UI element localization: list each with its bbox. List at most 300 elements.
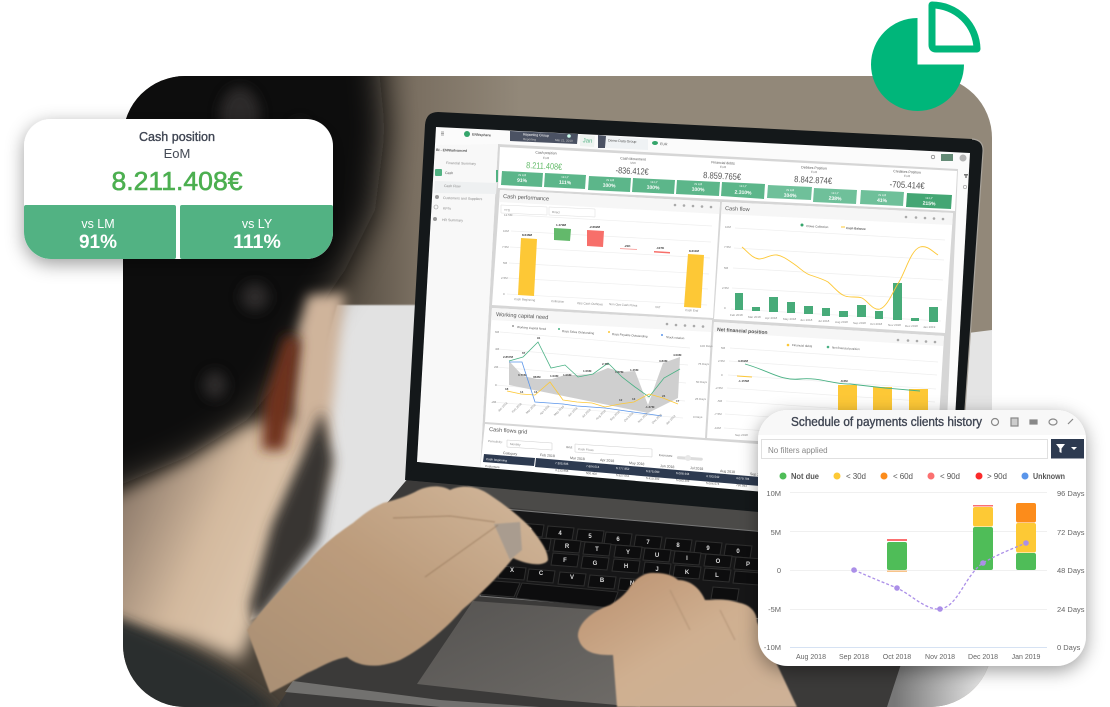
panel: cash flows grid: 5.083.393 — [676, 478, 690, 483]
right axis: 48 Days — [1057, 566, 1085, 575]
keyboard keys: 8 — [676, 543, 680, 549]
month axis: Jan 2019 — [1012, 654, 1041, 661]
waterfall value labels: -21K — [624, 244, 631, 248]
month labels: Jul 2018 — [581, 408, 592, 419]
sidebar: KPI's — [443, 207, 451, 211]
axis labels: 10M — [725, 225, 731, 229]
month axis: Sep 2018 — [839, 654, 869, 661]
legend — [800, 224, 804, 226]
keyboard keys: Y — [626, 550, 630, 556]
waterfall value labels: 8.646M — [522, 233, 533, 237]
KPI: debtors position: vs LY — [831, 191, 839, 195]
KPI: financial debts: Financial debts — [711, 160, 735, 166]
panel: cash flows grid: 3.233.956 — [555, 468, 569, 473]
month labels: Jun 2018 — [567, 406, 579, 418]
value labels: 17 — [676, 399, 680, 403]
sidebar: Customers and Suppliers — [443, 196, 483, 201]
KPI: financial debts: 100% — [692, 187, 705, 193]
month labels: Nov 2018 — [888, 323, 901, 327]
axis labels: -2M — [491, 400, 497, 404]
month labels: May 2018 — [783, 317, 797, 321]
panel title: Cash flows grid — [489, 427, 528, 436]
axis labels: 100 Days — [700, 344, 713, 348]
legend: > 90d — [987, 472, 1007, 481]
value labels: 91 — [537, 336, 541, 340]
KPI: cash position: 111% — [559, 180, 572, 186]
value labels: -1.37M — [645, 405, 655, 409]
table right of the laptop — [966, 330, 992, 410]
keyboard keys: 4 — [558, 531, 562, 537]
panel: net financial position: Net financial position — [832, 346, 860, 351]
KPI: debtors position — [767, 165, 857, 204]
keyboard keys: X — [510, 568, 514, 574]
legend: Days Payable Outstanding — [612, 332, 648, 339]
table header — [503, 451, 765, 477]
sidebar: HR Summary — [442, 218, 463, 223]
screen top bar: Mar 21, 2019 — [555, 138, 573, 143]
KPI: creditors position — [860, 169, 952, 209]
value labels: 67 — [522, 351, 526, 355]
value labels: 1.03M — [550, 374, 559, 378]
left axis: 5M — [771, 528, 781, 537]
table header: Apr 2018 — [600, 458, 614, 463]
right axis — [1057, 489, 1085, 652]
vs LY label: vs LY — [242, 217, 273, 231]
table header: Category — [503, 451, 518, 456]
toolbar icons — [674, 204, 712, 208]
filter button — [1051, 439, 1084, 458]
KPI: cash position: vs LM — [518, 173, 527, 177]
month labels: Dec 2018 — [905, 324, 918, 328]
month labels — [730, 313, 936, 329]
panel: cash flows grid: Cash Flows — [578, 447, 594, 452]
keyboard keys: E — [535, 542, 539, 548]
keyboard keys — [476, 523, 762, 608]
left axis — [764, 489, 781, 652]
KPI: cash position — [501, 150, 586, 189]
legend: Not due — [791, 472, 820, 481]
panel: cash performance: Direct — [552, 210, 560, 214]
panel: working capital need — [485, 308, 713, 438]
photo: man working on a laptop — [123, 76, 992, 707]
KPI: creditors position: -705.414€ — [889, 179, 925, 191]
panel gutter — [480, 144, 958, 490]
grid filters: Periodicity: — [488, 439, 503, 444]
dashed days line — [851, 540, 1029, 612]
days sales line — [509, 342, 680, 397]
popup title: Schedule of payments clients history — [791, 415, 983, 429]
date badge — [580, 135, 595, 147]
panel: cash performance — [492, 190, 720, 318]
filter input — [762, 440, 1048, 458]
keyboard keys: V — [570, 575, 574, 581]
axis labels: 5M — [721, 346, 726, 350]
logo — [464, 131, 470, 137]
panel: cash flows grid: 4.793.542 — [706, 474, 720, 479]
panel: cash flows grid: Grid: — [566, 445, 573, 449]
value labels: 13 — [534, 390, 538, 394]
screen top bar: Reporting — [523, 137, 536, 142]
table dark row — [483, 454, 535, 466]
month labels: Mar 2018 — [525, 403, 537, 415]
grid lines — [790, 492, 1047, 648]
axis labels: 50 Days — [696, 380, 708, 384]
keyboard keys: I — [686, 556, 688, 562]
value labels: 24 — [662, 394, 666, 398]
value labels: 3.262M — [738, 359, 749, 363]
tile: vs LM — [24, 205, 176, 259]
finger creases — [393, 516, 498, 577]
ear shadow — [262, 335, 300, 450]
KPI: creditors position: EoM — [904, 174, 911, 178]
KPI: creditors position: vs LY — [925, 196, 933, 200]
keyboard keys: 5 — [588, 534, 592, 540]
panel title: Cash flow — [725, 206, 751, 213]
axis labels: 0 — [721, 373, 723, 377]
popup header band — [758, 410, 1086, 435]
data group label — [606, 136, 648, 150]
screen top bar: EUR — [660, 142, 668, 146]
axis labels: 7.5M — [724, 245, 731, 249]
panel: cash flows grid: 5.927.051 — [616, 473, 630, 478]
KPI: financial debts: 8.859.765€ — [703, 170, 741, 182]
axis labels: 2.5M — [722, 286, 729, 290]
waterfall value labels: 1.479M — [556, 223, 567, 227]
screen top bar: ENNsphere — [472, 133, 491, 137]
menu icon — [441, 132, 444, 135]
panel: cash flows grid: Monthly — [510, 442, 521, 447]
right axis: 96 Days — [1057, 489, 1085, 498]
value labels: 2.857M — [503, 355, 514, 359]
legend: Unknown — [1033, 472, 1065, 481]
month labels: Nov 2018 — [637, 412, 649, 424]
KPI: financial debts: 2.310% — [734, 190, 752, 196]
panel: cash flows grid: Cash beginning — [486, 457, 507, 463]
table customers row: Customers — [485, 464, 500, 469]
keyboard keys: T — [595, 547, 599, 553]
axis labels: -2.5M — [715, 386, 723, 390]
value labels: 2.7M — [602, 362, 609, 366]
net position line — [745, 364, 920, 391]
legend — [780, 472, 1065, 481]
value labels: 18 — [505, 387, 509, 391]
thumb nail — [494, 522, 522, 560]
value labels: 4.09M — [673, 353, 682, 357]
legend: Stock rotation — [666, 335, 685, 340]
screen bottom cover — [405, 462, 950, 525]
axis labels: -7.5M — [714, 412, 722, 416]
grid lines — [507, 215, 712, 305]
KPI: cash movement: 100% — [647, 185, 660, 191]
waterfall categories: Cash End — [685, 308, 699, 313]
toolbar icons — [905, 216, 944, 220]
waterfall categories: Ops Cash Outflows — [577, 301, 603, 306]
keyboard keys: 0 — [736, 549, 740, 555]
panel: cash flows grid: 6.777.852 — [616, 466, 630, 471]
axis labels: 7.5M — [502, 245, 509, 249]
keyboard keys: N — [630, 581, 634, 587]
month axis: Aug 2018 — [796, 654, 826, 661]
panel: cash flows grid: 6.008.444 — [676, 471, 690, 476]
waterfall categories: Collection — [551, 299, 565, 304]
month labels: Jun 2018 — [800, 318, 813, 322]
currency badge — [652, 141, 658, 145]
value labels: 13 — [632, 397, 636, 401]
left axis: -10M — [764, 643, 781, 652]
axis labels: -10M — [714, 426, 721, 430]
blurred wall background — [123, 76, 992, 707]
card value: 8.211.408€ — [112, 166, 243, 196]
KPI: debtors position: 104% — [784, 193, 797, 199]
stacked bar: Dec 2018 — [973, 505, 993, 570]
value labels: 0.76M — [518, 373, 527, 377]
ear upper and cheek — [292, 293, 345, 455]
yellow bars — [838, 385, 928, 424]
keyboard keys: J — [655, 567, 659, 573]
month axis: Dec 2018 — [968, 654, 998, 661]
month axis: Nov 2018 — [925, 654, 955, 661]
value labels: 12 — [619, 398, 623, 402]
KPI: cash position: 8.211.408€ — [526, 160, 562, 172]
KPI: financial debts: vs LY — [739, 184, 747, 188]
icon: pie chart — [871, 5, 977, 111]
bars — [735, 283, 938, 322]
legend — [787, 344, 789, 346]
right axis: 24 Days — [1057, 605, 1085, 614]
laptop base — [278, 480, 900, 707]
card: cash position — [24, 119, 333, 259]
KPI: financial debts — [676, 160, 765, 199]
keyboard keys: 3 — [528, 528, 532, 534]
keyboard keys: 7 — [646, 540, 650, 546]
keyboard keys: K — [685, 570, 690, 576]
panel: cash flows grid: 500.400 — [586, 471, 597, 476]
KPI: debtors position: vs LM — [786, 188, 795, 192]
gray strip below the lid — [467, 486, 758, 530]
month labels: Oct 2018 — [870, 322, 883, 326]
sidebar: Cash — [445, 171, 453, 175]
left axis: -5M — [768, 605, 781, 614]
KPI row — [498, 147, 957, 211]
value labels: 1.45M — [630, 368, 639, 372]
keyboard keys: U — [655, 553, 659, 559]
value labels: -8.6M — [840, 379, 848, 383]
month labels: Mar 2018 — [748, 315, 761, 319]
sidebar: Cash Flow — [444, 184, 461, 189]
month labels: Jan 2018 — [497, 401, 509, 413]
axis labels: 75 Days — [698, 362, 710, 366]
beard — [250, 410, 333, 625]
KPI: cash movement: vs LM — [606, 178, 615, 182]
table header: Feb 2018 — [540, 453, 555, 458]
panel: cash flows grid: 5.410.392 — [646, 476, 660, 481]
keyboard keys: 9 — [706, 546, 710, 552]
panel: cash flows grid: 790.043 — [736, 483, 747, 488]
sidebar menu: Financial Summary — [446, 161, 476, 166]
dark shirt shoulder — [100, 612, 280, 707]
filters — [501, 205, 547, 215]
month labels: May 2018 — [553, 404, 565, 417]
value labels — [503, 336, 682, 409]
KPI: debtors position: Debtors Position — [801, 165, 827, 171]
panel: cash flows grid: 7.305.905 — [555, 461, 569, 466]
waterfall value labels: 8.211M — [689, 249, 699, 253]
panel: cash flows grid: 7.604.014 — [586, 464, 600, 469]
laptop lid bezel — [405, 112, 983, 530]
axis labels — [491, 330, 713, 419]
grid lines — [724, 348, 938, 442]
keyboard well — [480, 509, 758, 619]
keyboard keys: B — [600, 578, 605, 584]
front edge of the base — [285, 681, 540, 707]
axis labels: 0 — [503, 292, 505, 296]
axis labels: 25 Days — [695, 397, 707, 401]
table header: Jun 2018 — [660, 464, 675, 469]
financial debts short line — [737, 376, 752, 377]
keyboard keys: P — [746, 562, 750, 568]
month labels: Jul 2018 — [818, 319, 830, 323]
KPI: creditors position: 215% — [923, 201, 936, 207]
right axis: 0 Days — [1057, 643, 1081, 652]
KPI: cash movement — [588, 156, 675, 194]
value labels: 1.06M — [563, 373, 572, 377]
KPI: cash movement: Cash Movement — [620, 156, 646, 162]
popup: schedule of payments clients history: No filters applied — [768, 446, 828, 455]
KPI: cash movement: vs LY — [650, 180, 658, 184]
month axis — [796, 654, 1041, 661]
axis labels: 12.5M — [504, 213, 513, 217]
vs LM value: 91% — [79, 232, 117, 253]
KPI: debtors position: EoM — [811, 170, 818, 174]
panel: net financial position: Financial debts — [792, 343, 813, 348]
month label: Sep 2018 — [735, 433, 748, 437]
hair highlights — [200, 84, 272, 401]
sidebar — [418, 144, 498, 470]
month labels: Apr 2018 — [539, 404, 551, 416]
panel title: Cash performance — [503, 194, 549, 203]
axis labels: 0 — [724, 306, 726, 310]
legend: Days Sales Outstanding — [562, 329, 595, 335]
table header: Jul 2018 — [690, 466, 703, 471]
value labels — [738, 359, 848, 383]
panel: cash flow — [714, 202, 953, 333]
KPI: financial debts: EoM — [720, 165, 727, 169]
keyboard keys: R — [565, 544, 570, 550]
month labels: Dec 2018 — [651, 413, 663, 425]
stacked bar: Jan 2019 — [1016, 503, 1036, 570]
table header: May 2018 — [629, 461, 645, 466]
panel: cash performance: YTD — [504, 208, 511, 212]
laptop screen — [417, 127, 970, 468]
month labels: Oct 2018 — [623, 411, 635, 423]
axis labels: 6M — [495, 330, 500, 334]
waterfall value labels — [522, 223, 699, 253]
right hand — [578, 573, 797, 707]
KPI: cash position: EoM — [543, 156, 550, 160]
dark hair — [123, 76, 406, 494]
screen top bar: Reporting Group — [523, 133, 549, 138]
left axis: 10M — [766, 489, 781, 498]
table header: Mar 2018 — [570, 456, 585, 461]
value labels: -1.155M — [738, 379, 750, 383]
panel: cash flow: Cash Balance — [846, 226, 866, 231]
screen top bar: Demo Data Group — [608, 139, 637, 144]
table header: Sep 2018 — [750, 472, 765, 477]
days payable line — [507, 382, 678, 407]
waterfall categories: Cash Beginning — [514, 297, 536, 302]
grid lines — [493, 332, 690, 418]
month labels: Feb 2018 — [511, 402, 523, 414]
waterfall categories: VAT — [655, 305, 661, 309]
screen top bar: Jan — [583, 138, 593, 145]
axis labels — [714, 346, 726, 430]
panel title: Net financial position — [717, 327, 768, 336]
toolbar icons — [666, 323, 704, 328]
table header: Aug 2018 — [720, 469, 735, 474]
popup: schedule of payments clients history — [758, 410, 1086, 666]
axis labels: 0 — [495, 383, 497, 387]
working capital area — [509, 357, 680, 413]
value labels: 1.07M — [615, 370, 624, 374]
grid lines — [731, 228, 945, 321]
keyboard keys: G — [593, 561, 598, 567]
KPI: creditors position: vs LM — [878, 193, 887, 197]
KPI: debtors position: 238% — [829, 196, 842, 202]
axis labels: 10M — [503, 229, 509, 233]
vs LM label: vs LM — [81, 217, 115, 231]
panel: cash flows grid: 4.079.794 — [736, 476, 750, 481]
month labels: Aug 2018 — [595, 409, 607, 421]
toolbar icons — [992, 418, 1073, 426]
month labels — [497, 401, 677, 426]
screen top bar — [441, 131, 966, 162]
waterfall categories: Non Ops Cash Flows — [609, 302, 638, 308]
reporting group badge — [510, 131, 578, 144]
keyboard keys: F — [563, 558, 567, 564]
legend: < 90d — [940, 472, 960, 481]
waterfall categories — [514, 297, 699, 313]
month labels: Apr 2018 — [765, 316, 778, 320]
month labels: Aug 2018 — [835, 320, 848, 324]
value labels: 1.06M — [583, 369, 592, 373]
keyboard keys: O — [716, 559, 721, 565]
legend: < 30d — [846, 472, 866, 481]
axis labels: 2.5M — [501, 276, 508, 280]
card subtitle: EoM — [164, 146, 190, 161]
card title: Cash position — [139, 129, 215, 144]
waterfall value labels: -2.662M — [589, 225, 601, 229]
sidebar heading: BI - ENNIadvanced — [436, 148, 467, 153]
waterfall bars — [518, 238, 537, 296]
axis labels — [501, 213, 513, 296]
keyboard keys: H — [624, 564, 628, 570]
stock rotation line — [509, 362, 662, 416]
month labels: Sep 2018 — [853, 321, 866, 325]
silver lid edge — [965, 139, 983, 410]
axis labels: -5M — [717, 399, 723, 403]
panel: cash flows grid: Exercises: — [659, 453, 673, 458]
KPI: cash position: 91% — [517, 178, 528, 184]
left hand — [247, 486, 548, 693]
right axis: 72 Days — [1057, 528, 1085, 537]
silver area at the bottom right — [887, 666, 988, 707]
KPI: cash position: vs LY — [561, 175, 569, 179]
panel: cash flows grid: 6.975.060 — [646, 469, 660, 474]
man's face and neck — [100, 420, 330, 660]
axis labels: 2.5M — [718, 359, 725, 363]
knuckle creases — [670, 590, 735, 640]
KPI: cash position: Cash position — [535, 150, 557, 156]
